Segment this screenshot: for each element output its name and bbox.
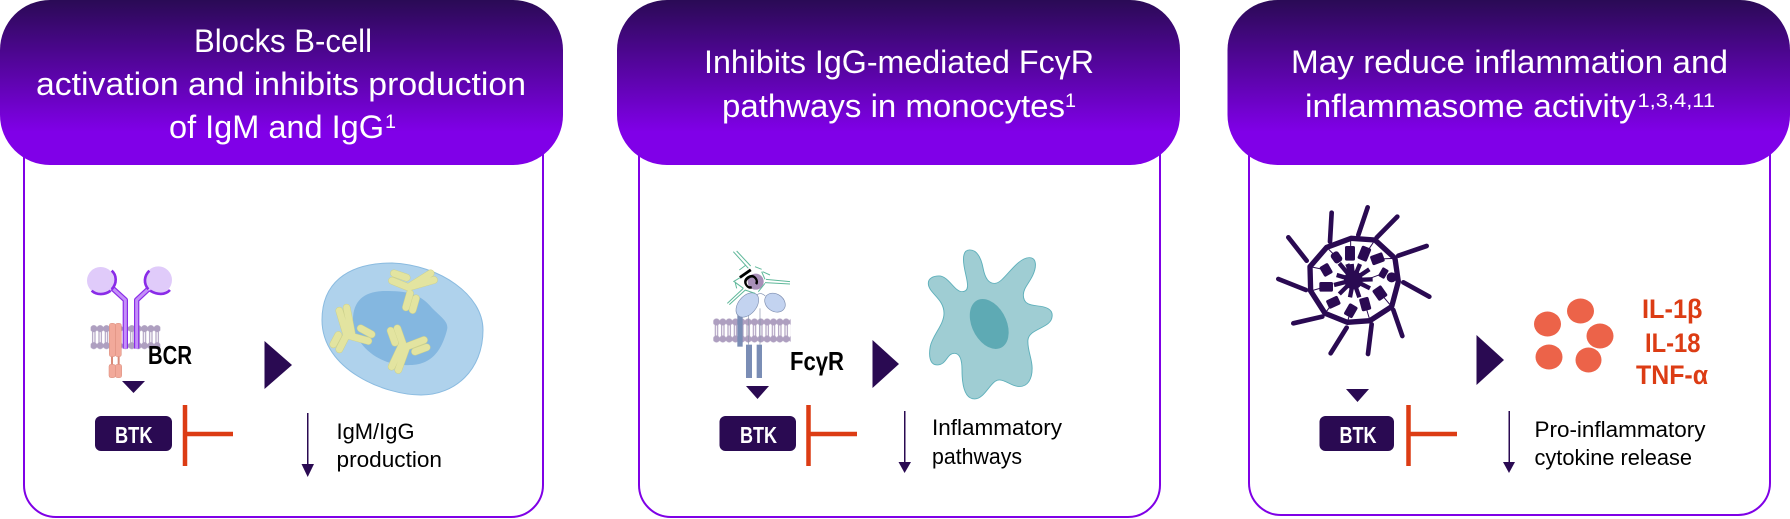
- heading text: [704, 44, 1094, 124]
- BTK box: [95, 416, 172, 451]
- icon: B-cell receptor: [87, 266, 172, 378]
- heading text: 1: [1065, 91, 1076, 112]
- label: IgM/IgG production: [336, 419, 442, 472]
- label: IgM/IgG production: production: [336, 447, 442, 472]
- big right arrow: [1476, 335, 1504, 385]
- heading text: [36, 23, 526, 145]
- heading text: Inhibits IgG-mediated FcγR: [704, 44, 1094, 80]
- BTK box: [1320, 416, 1394, 451]
- down arrow: reduced production: [302, 413, 314, 477]
- heading text: [1291, 44, 1728, 124]
- panel: B-cell activation: [0, 0, 563, 517]
- icon: Fc gamma receptor with immune complex: [713, 251, 791, 378]
- FcγR label: FcγR: [790, 346, 844, 376]
- inhibition bar: [185, 405, 233, 466]
- label: inflammatory pathways: pathways: [932, 444, 1022, 469]
- BTK box: [720, 416, 796, 451]
- BTK box: BTK: [1340, 422, 1377, 448]
- BCR label: BCR: [148, 340, 192, 370]
- heading banner: [1228, 0, 1790, 165]
- panel frame: [639, 100, 1160, 517]
- panel: monocytes: [617, 0, 1180, 517]
- BTK box: BTK: [115, 422, 153, 448]
- heading text: activation and inhibits production: [36, 66, 526, 102]
- heading text: Blocks B-cell: [194, 23, 372, 59]
- icon: cytokine circles: [1534, 298, 1614, 372]
- big right arrow: [264, 341, 292, 389]
- icon: Fc gamma receptor with immune complex: IC: [734, 266, 763, 294]
- label: pro-inflammatory cytokine release: Pro-inflammatory: [1534, 417, 1706, 442]
- label: inflammatory pathways: Inflammatory: [932, 415, 1062, 440]
- heading text: May reduce inflammation and: [1291, 44, 1728, 80]
- heading text: 1: [385, 112, 396, 133]
- heading banner: [0, 0, 563, 165]
- icon: plasma cell with antibodies: [322, 263, 483, 395]
- cytokine labels: IL-18: [1645, 328, 1700, 358]
- icon: monocyte: [928, 250, 1052, 399]
- heading banner: [617, 0, 1180, 165]
- down arrow: reduced cytokine release: [1503, 411, 1515, 473]
- down arrow: reduced pathways: [898, 411, 911, 473]
- small down arrow: [1346, 389, 1369, 402]
- heading text: inflammasome activity: [1305, 88, 1636, 124]
- inhibition bar: [1408, 405, 1457, 466]
- label: pro-inflammatory cytokine release: cytokine release: [1534, 445, 1692, 470]
- panel frame: [24, 100, 543, 517]
- BTK box: BTK: [740, 422, 777, 448]
- small down arrow: [746, 386, 769, 399]
- panel frame: [1249, 100, 1770, 515]
- panel: inflammasome: [1228, 0, 1790, 515]
- label: inflammatory pathways: [932, 415, 1062, 469]
- cytokine labels: IL-1β: [1642, 294, 1702, 324]
- icon: inflammasome: [1278, 207, 1429, 354]
- label: pro-inflammatory cytokine release: [1534, 417, 1706, 470]
- inhibition bar: [808, 405, 857, 466]
- heading text: pathways in monocytes: [722, 88, 1065, 124]
- label: IgM/IgG production: IgM/IgG: [336, 419, 414, 444]
- heading text: of IgM and IgG: [169, 109, 384, 145]
- cytokine labels: TNF-α: [1636, 360, 1708, 390]
- small down arrow: [122, 381, 145, 393]
- heading text: 1,3,4,11: [1638, 91, 1715, 112]
- cytokine labels: [1636, 294, 1708, 390]
- big right arrow: [872, 340, 899, 388]
